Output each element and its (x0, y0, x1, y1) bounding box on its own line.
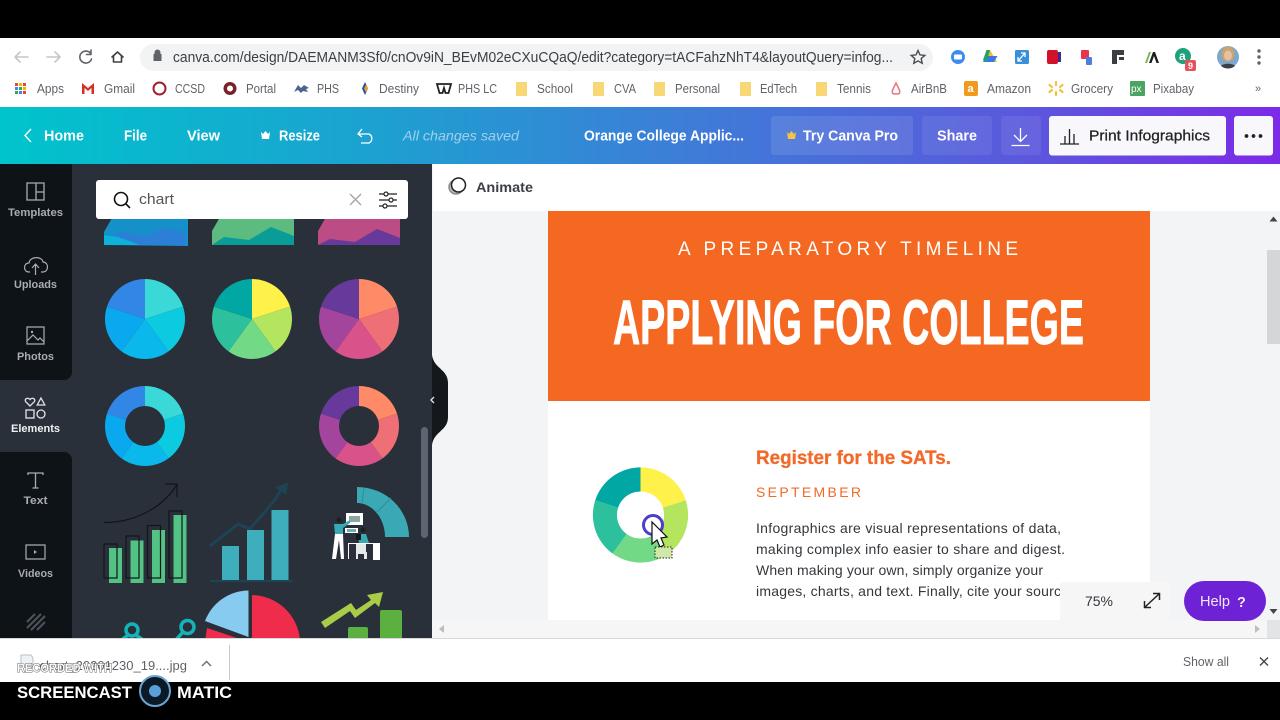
file icon (21, 655, 33, 667)
bookmark star (911, 50, 925, 63)
extension icons: a (1179, 49, 1186, 63)
bookmarks bar: Tennis (837, 82, 871, 96)
expand chevron (202, 662, 211, 666)
area chart: green (212, 217, 294, 245)
resize crown icon (261, 131, 270, 139)
help button: ? (1237, 595, 1246, 611)
screencast-o-matic watermark (17, 661, 232, 706)
bookmarks bar: School (537, 82, 573, 96)
bookmarks bar: EdTech (760, 82, 797, 96)
bookmarks bar: Portal (246, 82, 276, 96)
bookmarks bar: Personal (675, 82, 720, 96)
extension icons: 9 (1188, 61, 1193, 71)
horizontal scrollbar (433, 620, 1280, 638)
phs lc icon (437, 84, 451, 93)
section body text: Infographics are visual representations of data, (756, 520, 1061, 536)
elements tab: Elements (11, 423, 60, 435)
donut chart: purple (319, 386, 399, 466)
bookmarks bar: CCSD (175, 82, 205, 96)
videos tab: Videos (18, 568, 53, 580)
templates tab: Templates (8, 207, 63, 219)
text tab: Text (24, 495, 48, 507)
uploads tab: Uploads (14, 279, 57, 291)
home menu item: Home (44, 128, 84, 144)
document page (548, 211, 1150, 620)
phs icon (294, 85, 309, 93)
share button (922, 116, 992, 155)
more bookmarks: » (1255, 83, 1261, 95)
section body text: making complex info easier to share and digest. (756, 541, 1065, 557)
download bar (0, 638, 1280, 682)
canva header bar (0, 107, 1280, 164)
zoom control (1060, 582, 1170, 622)
donut chart: blue (105, 386, 185, 466)
portal icon (224, 82, 236, 95)
apps grid icon (15, 83, 26, 94)
destiny icon (362, 82, 368, 95)
folder icons (516, 82, 827, 96)
collapse panel tab (431, 355, 448, 445)
downloaded file name: chart_20201230_19....jpg (40, 658, 187, 673)
photos tab: Photos (17, 351, 54, 363)
show all button: Show all (1183, 655, 1229, 669)
pie chart: red and blue (205, 590, 300, 642)
text tab (24, 473, 48, 507)
undo arrow (358, 129, 372, 143)
browser menu (1257, 49, 1261, 65)
file menu item: File (124, 128, 147, 144)
bar chart: teal with arrow (210, 483, 293, 582)
bookmarks bar: Destiny (379, 82, 420, 96)
bookmarks bar: Apps (37, 82, 64, 96)
panel scrollbar (421, 427, 428, 538)
orange banner (548, 211, 1150, 401)
search box (96, 180, 408, 219)
search query: chart (139, 192, 174, 208)
help button: Help (1200, 594, 1230, 610)
help button (1184, 581, 1266, 621)
section date: SEPTEMBER (756, 484, 861, 500)
elements panel (72, 164, 432, 642)
animate label: Animate (476, 179, 533, 195)
vertical scrollbar (1266, 211, 1280, 620)
pie chart: green (212, 279, 292, 359)
amazon icon: a (968, 83, 974, 95)
section heading: Register for the SATs. (756, 448, 951, 469)
divider (229, 645, 230, 680)
bookmarks bar: PHS LC (458, 82, 497, 96)
top black letterbox (0, 0, 1280, 38)
bookmarks bar (15, 81, 1261, 96)
airbnb icon (892, 83, 900, 94)
address bar (140, 44, 933, 71)
extension icons (951, 48, 1196, 71)
lock icon (154, 50, 162, 61)
resize menu item: Resize (279, 128, 320, 144)
save status: All changes saved (402, 128, 520, 144)
grocery icon (1050, 82, 1062, 95)
network chart fragment (119, 620, 194, 642)
canvas workspace background (432, 164, 1280, 638)
filter icon (379, 192, 397, 208)
uploads tab (14, 258, 57, 291)
section body text: images, charts, and text. Finally, cite your sourc (756, 583, 1061, 599)
view menu item: View (187, 128, 221, 144)
templates tab (8, 183, 63, 219)
fullscreen icon (1144, 594, 1160, 608)
mouse cursor with click highlight (644, 516, 672, 558)
left sidebar (0, 164, 72, 638)
bar chart: green with arrow (104, 484, 186, 583)
videos tab (18, 545, 53, 580)
donut chart on page (593, 467, 688, 563)
zoom control: 75% (1085, 594, 1113, 609)
bookmarks bar: Amazon (987, 82, 1031, 96)
clear icon (350, 194, 361, 205)
bookmarks bar: PHS (317, 82, 339, 96)
growth arrow with bars (321, 592, 402, 642)
more options button (1234, 116, 1273, 156)
recorded with label: RECORDED WITH (17, 661, 112, 675)
download button (1001, 116, 1041, 155)
screencast wordmark: SCREENCAST (17, 683, 133, 702)
bookmarks bar: AirBnB (911, 82, 947, 96)
ccsd icon (154, 82, 166, 94)
animate toolbar (433, 164, 1280, 211)
elements tab (11, 398, 60, 435)
url text: canva.com/design/DAEMANM3Sf0/cnOv9iN_BEvM02eCXuCQaQ/edit?category=tACFahzNhT4&layoutQuery=infog... (173, 50, 893, 66)
bookmarks bar: Grocery (1071, 82, 1114, 96)
bookmarks bar: Gmail (104, 82, 135, 96)
pie chart: purple (319, 279, 399, 359)
try canva pro button (771, 116, 913, 155)
close download bar (1260, 658, 1268, 666)
amazon icon (964, 81, 978, 96)
section body text: When making your own, simply organize your (756, 562, 1043, 578)
illustration: people and gauge (332, 487, 409, 560)
try canva pro button: Try Canva Pro (803, 128, 898, 144)
share button: Share (937, 128, 977, 144)
bottom black letterbox (0, 682, 1280, 720)
bookmarks bar: CVA (614, 82, 637, 96)
area chart: blue (104, 218, 188, 246)
bookmarks bar: Pixabay (1153, 82, 1195, 96)
print infographics button (1049, 116, 1226, 156)
section body text (756, 520, 1065, 599)
pixabay icon: px (1131, 84, 1142, 95)
pie chart: blue (105, 279, 185, 359)
pixabay icon (1130, 81, 1145, 96)
gmail icon (82, 83, 94, 94)
search icon (114, 192, 130, 208)
background tab icon (27, 614, 45, 630)
navigation buttons (15, 50, 123, 63)
animate icon (449, 178, 466, 194)
document title: Orange College Applic... (584, 128, 744, 144)
matic wordmark: MATIC (177, 683, 232, 702)
area chart: purple (318, 217, 400, 245)
print infographics button: Print Infographics (1089, 128, 1210, 144)
banner subtitle: A PREPARATORY TIMELINE (678, 239, 1018, 260)
photos tab (17, 327, 54, 363)
logo (140, 676, 170, 706)
profile avatar (1217, 46, 1239, 69)
back chevron (25, 129, 31, 142)
browser toolbar (0, 38, 1280, 107)
active elements tab background (0, 372, 72, 460)
